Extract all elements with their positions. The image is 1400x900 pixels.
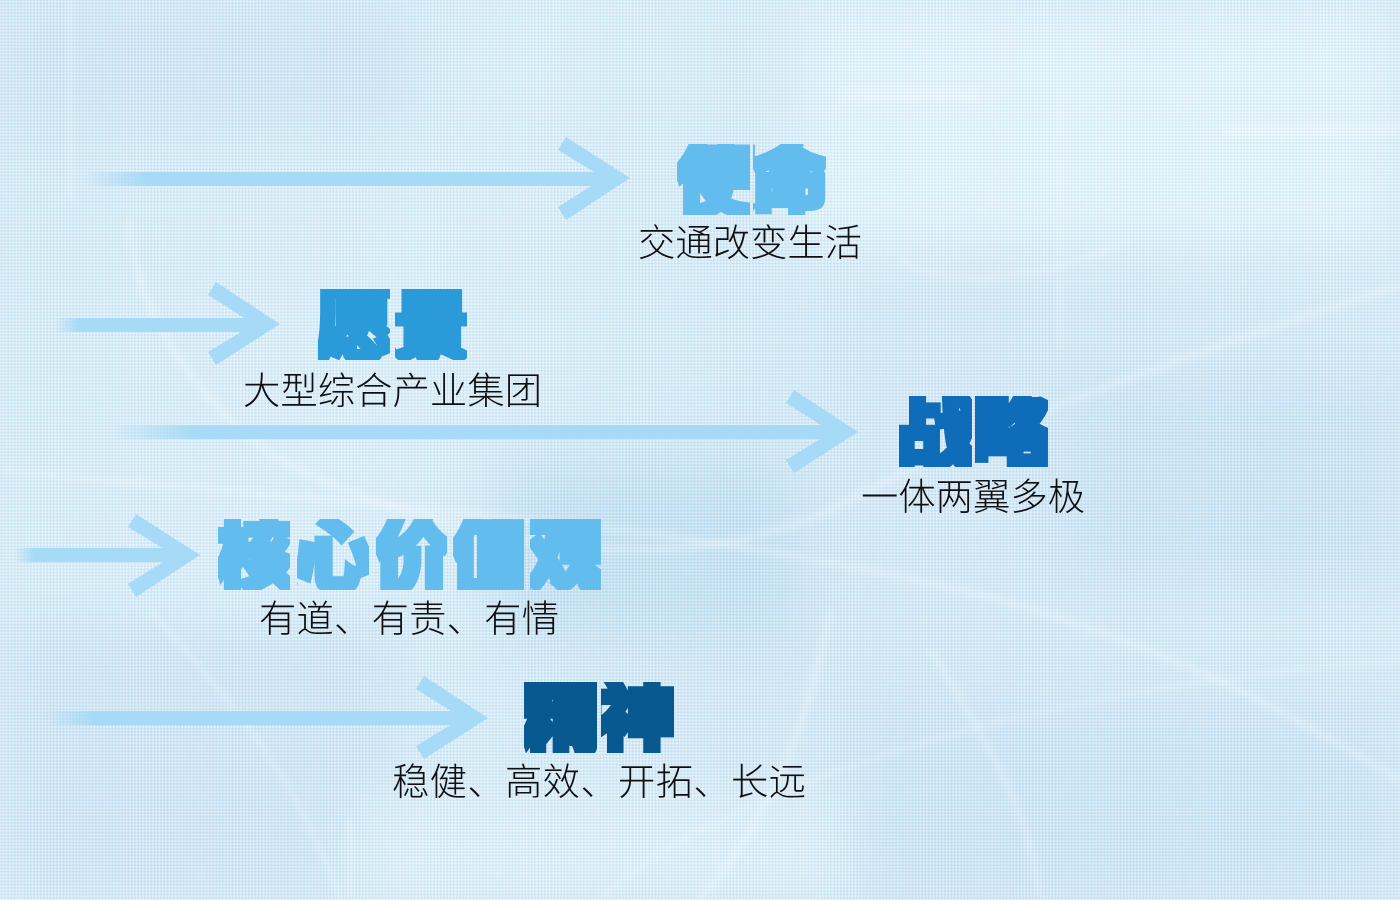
heading: 使命: 使命	[674, 137, 830, 226]
heading: 精神: 精神	[521, 675, 678, 764]
arrow: core values	[15, 514, 200, 597]
arrow: mission	[85, 137, 630, 220]
arrow: spirit	[45, 676, 488, 759]
text: mission description: 交通改变生活	[638, 222, 862, 264]
arrow: strategy	[110, 390, 858, 473]
text: spirit description: 稳健、高效、开拓、长远	[392, 761, 806, 803]
content layer	[18, 137, 1084, 798]
heading: 核心价值观: 核心价值观	[215, 512, 607, 601]
text: core values description: 有道、有责、有情	[259, 598, 559, 640]
text: strategy description: 一体两翼多极	[861, 476, 1085, 518]
heading: 战略: 战略	[896, 389, 1052, 478]
heading: 愿景: 愿景	[315, 282, 472, 371]
text: vision description: 大型综合产业集团	[243, 370, 542, 412]
arrow: vision	[55, 282, 280, 365]
